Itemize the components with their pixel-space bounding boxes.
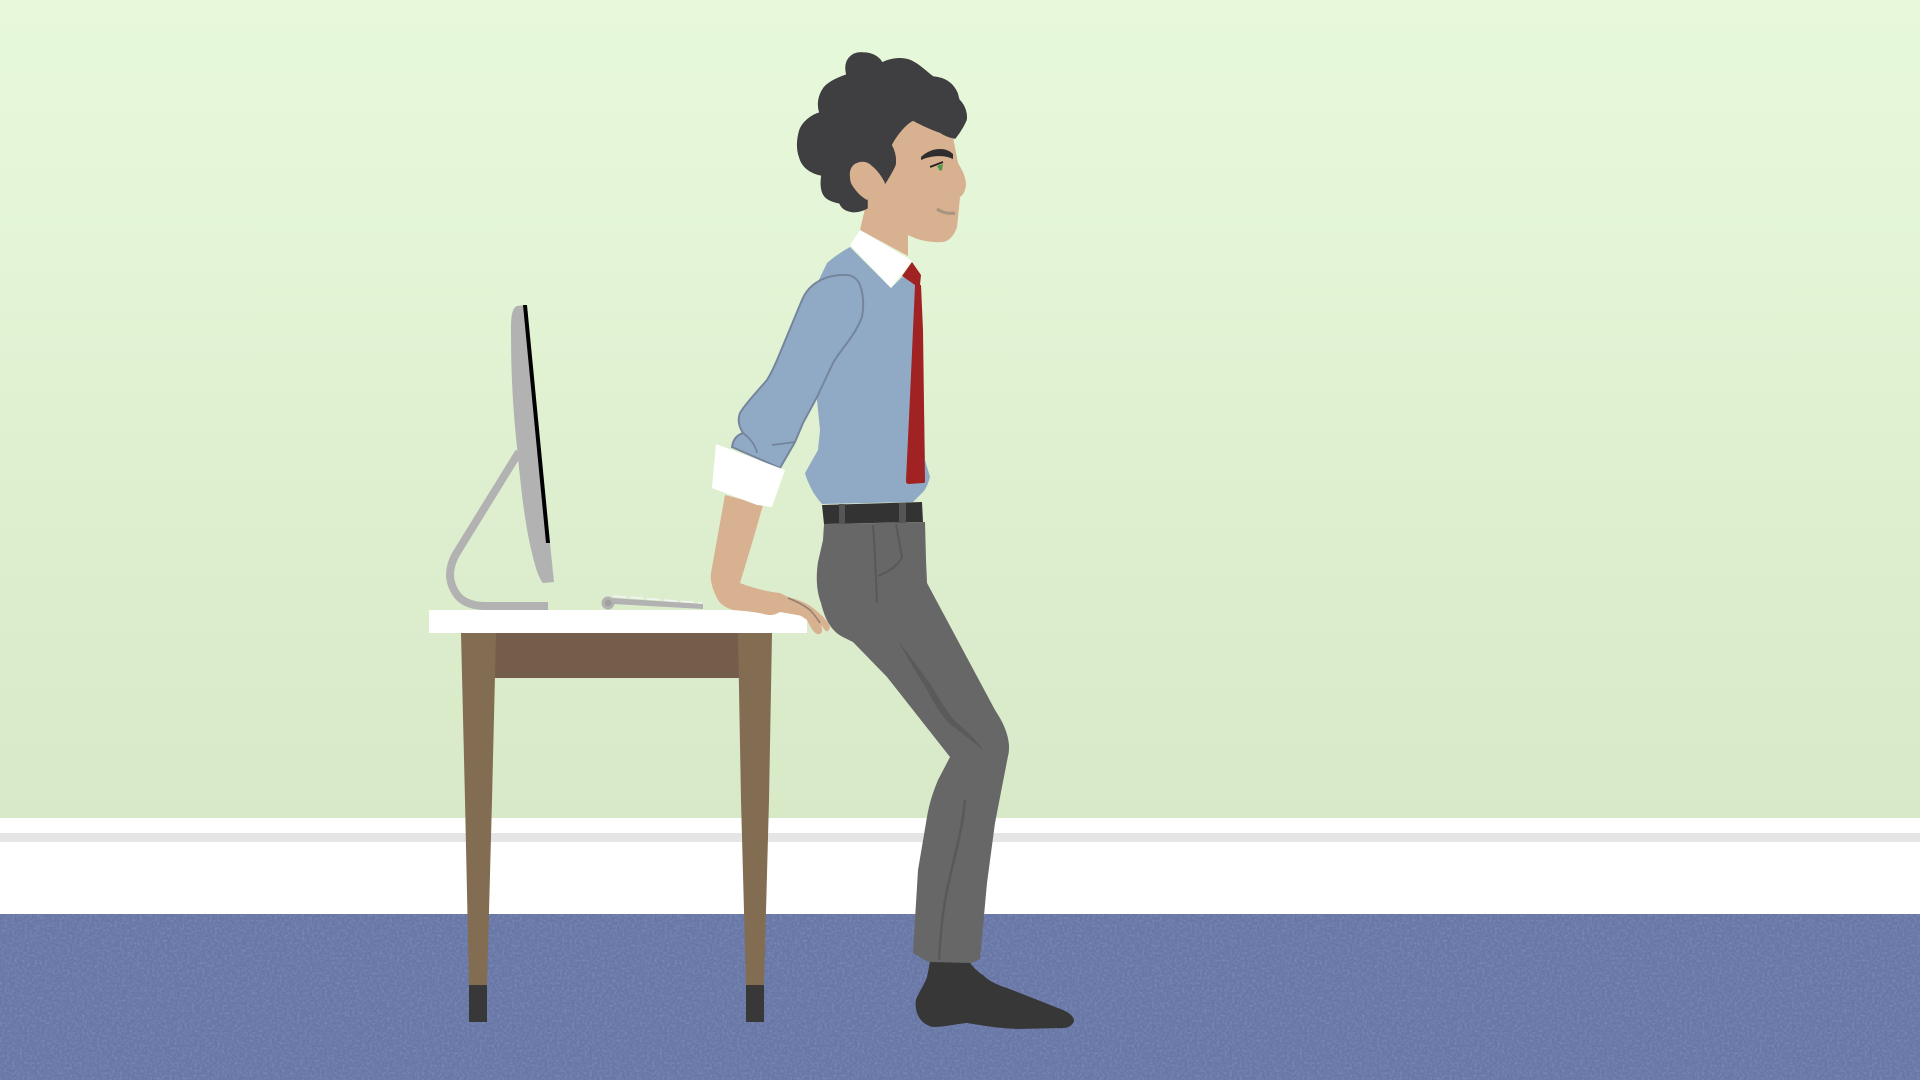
computer monitor — [450, 305, 554, 606]
shirt cuff — [712, 444, 785, 507]
keyboard — [602, 596, 703, 610]
shirt collar — [850, 230, 912, 288]
right leg foot cap — [746, 985, 764, 1022]
hand fold — [788, 598, 820, 623]
shirt body — [790, 247, 930, 504]
desk — [429, 610, 807, 1022]
baseboard — [0, 818, 1920, 915]
trousers — [817, 522, 1009, 964]
wall background — [0, 0, 1920, 819]
carpet floor — [0, 914, 1920, 1080]
pocket seam — [878, 524, 902, 576]
sleeve fold right — [772, 442, 795, 445]
rolled sleeve — [732, 275, 863, 468]
shin crease — [939, 800, 965, 960]
monitor body — [511, 305, 554, 583]
left desk leg — [461, 633, 496, 985]
person — [711, 53, 1074, 1029]
back arm and hand — [711, 495, 830, 634]
hair — [798, 53, 966, 212]
belt — [822, 502, 923, 524]
fly seam — [873, 525, 877, 603]
sock foot — [916, 962, 1074, 1029]
ear — [850, 162, 885, 200]
eyebrow — [921, 149, 953, 160]
desk apron — [494, 633, 740, 678]
left leg foot cap — [469, 985, 487, 1022]
desk top — [429, 610, 807, 633]
monitor screen — [523, 305, 550, 543]
necktie — [902, 262, 925, 484]
sleeve fold left — [743, 433, 757, 453]
thigh crease — [898, 640, 983, 750]
eye — [930, 162, 943, 171]
neck and face — [850, 120, 966, 256]
belt loop rear — [839, 504, 845, 524]
right desk leg — [738, 633, 772, 985]
belt loop front — [899, 503, 906, 523]
mouth — [937, 209, 955, 213]
monitor stand — [450, 452, 548, 606]
